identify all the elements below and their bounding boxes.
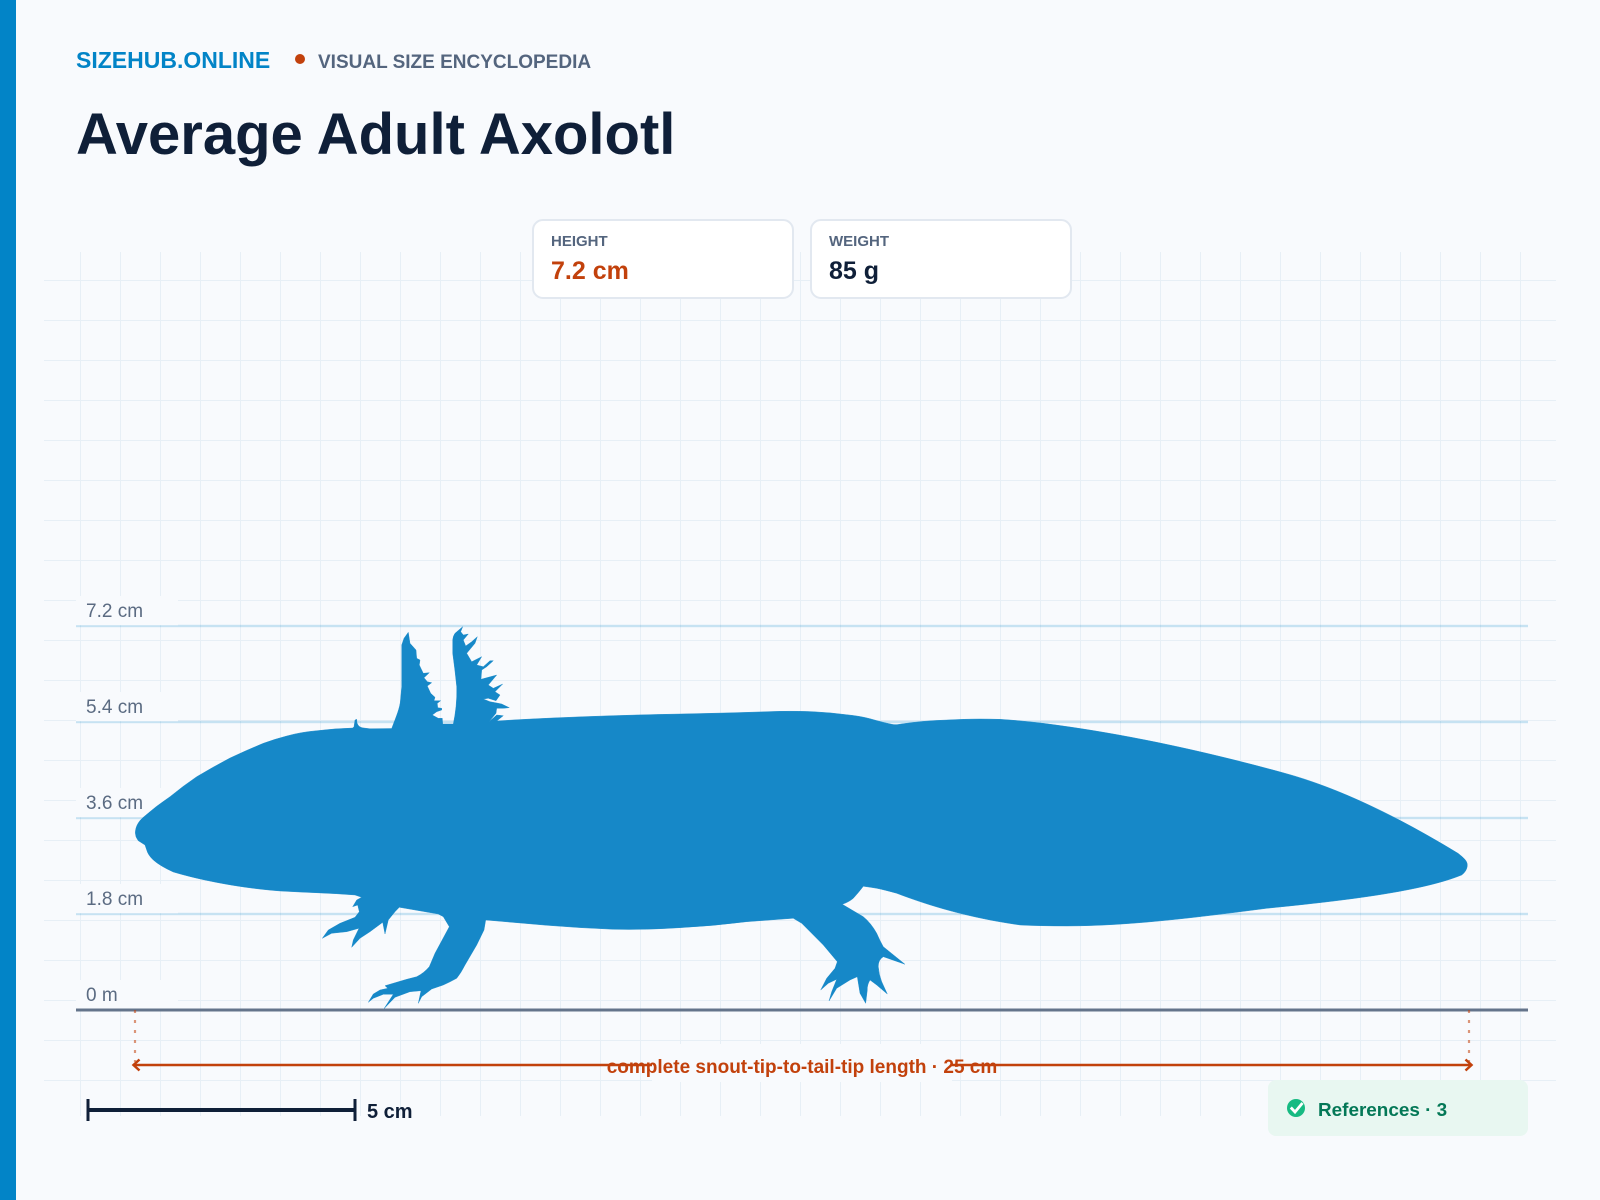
stat card: height: HEIGHT (551, 233, 608, 250)
references badge (1268, 1080, 1528, 1136)
height tick labels: 5.4 cm (86, 697, 143, 718)
icon: separator dot (295, 54, 305, 64)
length arrow (134, 1060, 1472, 1070)
axolotl silhouette (135, 627, 1467, 1009)
stat card: weight (811, 220, 1071, 298)
stat card: height: 7.2 cm (551, 257, 629, 285)
length label (607, 1044, 997, 1082)
length label: complete snout-tip-to-tail-tip length · 25 cm (607, 1057, 997, 1078)
height tick labels: 1.8 cm (86, 889, 143, 910)
tagline: VISUAL SIZE ENCYCLOPEDIA (318, 52, 591, 73)
dotted extent marker: right (1468, 1010, 1470, 1062)
stat card: weight: WEIGHT (829, 233, 889, 250)
height tick labels: 0 m (86, 985, 118, 1006)
brand name: SIZEHUB.ONLINE (76, 47, 270, 73)
height tick labels (76, 596, 178, 1008)
height tick labels: 7.2 cm (86, 601, 143, 622)
title: Average Adult Axolotl (76, 102, 675, 167)
accent sidebar (0, 0, 16, 1200)
height tick labels: 3.6 cm (86, 793, 143, 814)
references badge: References · 3 (1318, 1100, 1447, 1121)
scale bar (86, 1099, 413, 1123)
scale bar: 5 cm (367, 1101, 413, 1123)
height reference lines (76, 625, 1528, 915)
stat card: height (533, 220, 793, 298)
stat card: weight: 85 g (829, 257, 879, 285)
dotted extent marker: left (134, 1010, 136, 1062)
ground line (76, 1008, 1528, 1012)
icon: check (1287, 1099, 1305, 1117)
header brand line (76, 47, 591, 73)
